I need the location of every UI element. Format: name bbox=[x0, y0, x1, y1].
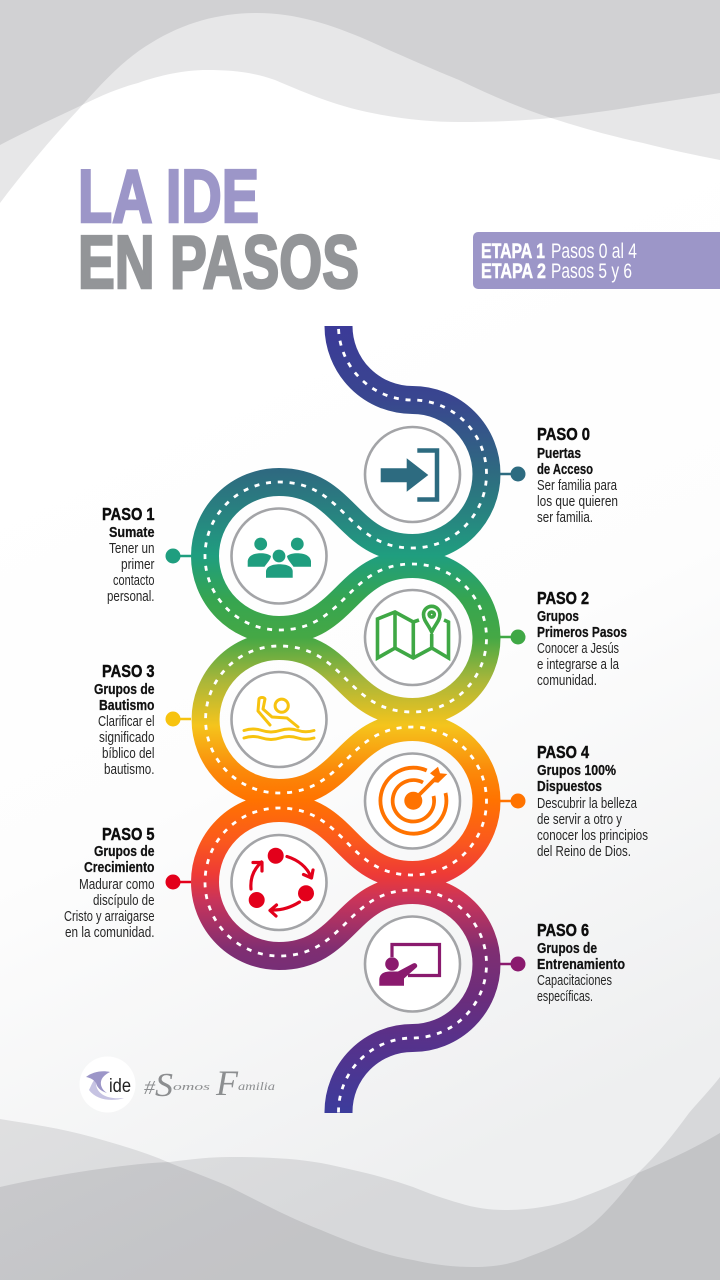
legend: etapas bbox=[473, 232, 720, 289]
subtitle paso 4: Grupos 100% bbox=[537, 763, 616, 779]
description paso 0: ser familia. bbox=[537, 509, 593, 526]
description paso 2: e integrarse a la bbox=[537, 656, 619, 673]
description paso 6: Capacitaciones bbox=[537, 972, 612, 989]
top wave light bbox=[0, 0, 720, 203]
description paso 6: específicas. bbox=[537, 988, 593, 1005]
subtitle paso 6: Grupos de bbox=[537, 941, 597, 957]
heading paso 4: PASO 4 bbox=[537, 742, 589, 762]
subtitle paso 4 bbox=[537, 763, 616, 795]
description paso 2: Conocer a Jesús bbox=[537, 640, 619, 657]
label: paso 6 bbox=[537, 920, 625, 1005]
description paso 4: de servir a otro y bbox=[537, 811, 622, 828]
heading paso 3: PASO 3 bbox=[102, 661, 155, 681]
hashtag signature: S bbox=[155, 1067, 173, 1104]
logo: ide bbox=[80, 1056, 136, 1112]
subtitle paso 3: Bautismo bbox=[99, 698, 155, 714]
top wave back bbox=[0, 0, 720, 145]
description paso 4: conocer los principios bbox=[537, 827, 648, 844]
description paso 6 bbox=[537, 972, 612, 1005]
road bbox=[205, 326, 487, 1113]
description paso 5 bbox=[64, 876, 154, 941]
subtitle paso 0: Puertas bbox=[537, 446, 581, 462]
label: paso 3 bbox=[94, 661, 155, 778]
etapa 2: Pasos 5 y 6 bbox=[551, 260, 632, 283]
connector paso 1 bbox=[166, 548, 191, 564]
hashtag signature: omos bbox=[173, 1082, 210, 1093]
label: paso 1 bbox=[102, 504, 155, 605]
connector paso 3 bbox=[166, 712, 191, 726]
description paso 3: bautismo. bbox=[104, 761, 154, 778]
description paso 2: comunidad. bbox=[537, 672, 597, 689]
description paso 5: en la comunidad. bbox=[65, 924, 154, 941]
etapa 2: ETAPA 2 bbox=[481, 260, 546, 283]
description paso 4: del Reino de Dios. bbox=[537, 843, 631, 860]
title line 2: EN PASOS bbox=[78, 220, 359, 304]
description paso 1: primer bbox=[121, 556, 154, 573]
hashtag signature: # bbox=[144, 1077, 156, 1099]
label: paso 0 bbox=[537, 424, 618, 526]
label: paso 5 bbox=[64, 824, 155, 941]
subtitle paso 3 bbox=[94, 682, 155, 714]
description paso 3: Clarificar el bbox=[98, 713, 154, 730]
etapa 2 bbox=[481, 260, 632, 283]
icon: people bbox=[232, 508, 326, 604]
icon: baptism swimmer bbox=[232, 672, 326, 767]
heading paso 5: PASO 5 bbox=[102, 824, 155, 844]
legend background bbox=[473, 232, 720, 289]
description paso 5: Cristo y arraigarse bbox=[64, 908, 154, 925]
description paso 1: personal. bbox=[107, 588, 154, 605]
etapa 1: Pasos 0 al 4 bbox=[551, 240, 637, 263]
icon: map bbox=[365, 590, 460, 685]
description paso 1: contacto bbox=[113, 572, 154, 589]
connector paso 2 bbox=[500, 630, 526, 644]
description paso 3 bbox=[98, 713, 154, 778]
subtitle paso 2 bbox=[537, 609, 627, 641]
connector paso 4 bbox=[500, 794, 526, 808]
hashtag signature: F bbox=[215, 1063, 239, 1103]
heading paso 1: PASO 1 bbox=[102, 504, 155, 524]
icon: target bbox=[365, 754, 460, 848]
heading paso 6: PASO 6 bbox=[537, 920, 589, 940]
bottom wave back bbox=[0, 1133, 720, 1280]
subtitle paso 5 bbox=[84, 844, 155, 876]
subtitle paso 5: Crecimiento bbox=[84, 860, 155, 876]
title bbox=[78, 154, 359, 304]
heading paso 2: PASO 2 bbox=[537, 588, 589, 608]
icon: teacher at board bbox=[365, 916, 460, 1012]
subtitle paso 0: de Acceso bbox=[537, 462, 593, 478]
description paso 0: los que quieren bbox=[537, 493, 618, 510]
subtitle paso 1: Sumate bbox=[109, 525, 154, 541]
etapa 1: ETAPA 1 bbox=[481, 240, 545, 263]
label: paso 4 bbox=[537, 742, 648, 860]
road surface bbox=[205, 326, 487, 1113]
description paso 1 bbox=[107, 540, 154, 605]
etapa 1 bbox=[481, 240, 637, 263]
subtitle paso 2: Primeros Pasos bbox=[537, 625, 627, 641]
heading paso 0: PASO 0 bbox=[537, 424, 590, 444]
hashtag signature: amilia bbox=[238, 1079, 275, 1093]
subtitle paso 3: Grupos de bbox=[94, 682, 154, 698]
icon: enter door bbox=[365, 427, 460, 522]
description paso 5: Madurar como bbox=[79, 876, 154, 893]
description paso 2 bbox=[537, 640, 619, 689]
hashtag signature bbox=[144, 1063, 275, 1104]
description paso 3: bíblico del bbox=[102, 745, 154, 762]
description paso 4 bbox=[537, 795, 648, 860]
logo: ide: ide bbox=[109, 1076, 131, 1097]
description paso 3: significado bbox=[99, 729, 154, 746]
bottom wave light bbox=[0, 1077, 720, 1280]
road dashes bbox=[205, 326, 487, 1113]
subtitle paso 4: Dispuestos bbox=[537, 779, 602, 795]
subtitle paso 6 bbox=[537, 941, 625, 973]
connector paso 6 bbox=[500, 956, 526, 972]
description paso 0 bbox=[537, 477, 618, 526]
description paso 1: Tener un bbox=[109, 540, 154, 557]
subtitle paso 5: Grupos de bbox=[94, 844, 154, 860]
subtitle paso 6: Entrenamiento bbox=[537, 957, 625, 973]
icon: growth cycle bbox=[232, 835, 326, 930]
description paso 0: Ser familia para bbox=[537, 477, 617, 494]
description paso 4: Descubrir la belleza bbox=[537, 795, 637, 812]
description paso 5: discípulo de bbox=[93, 892, 154, 909]
connector paso 5 bbox=[166, 874, 191, 890]
subtitle paso 2: Grupos bbox=[537, 609, 579, 625]
label: paso 2 bbox=[537, 588, 627, 689]
title line 1: LA IDE bbox=[78, 154, 259, 238]
connector paso 0 bbox=[500, 466, 526, 482]
subtitle paso 0 bbox=[537, 446, 593, 478]
